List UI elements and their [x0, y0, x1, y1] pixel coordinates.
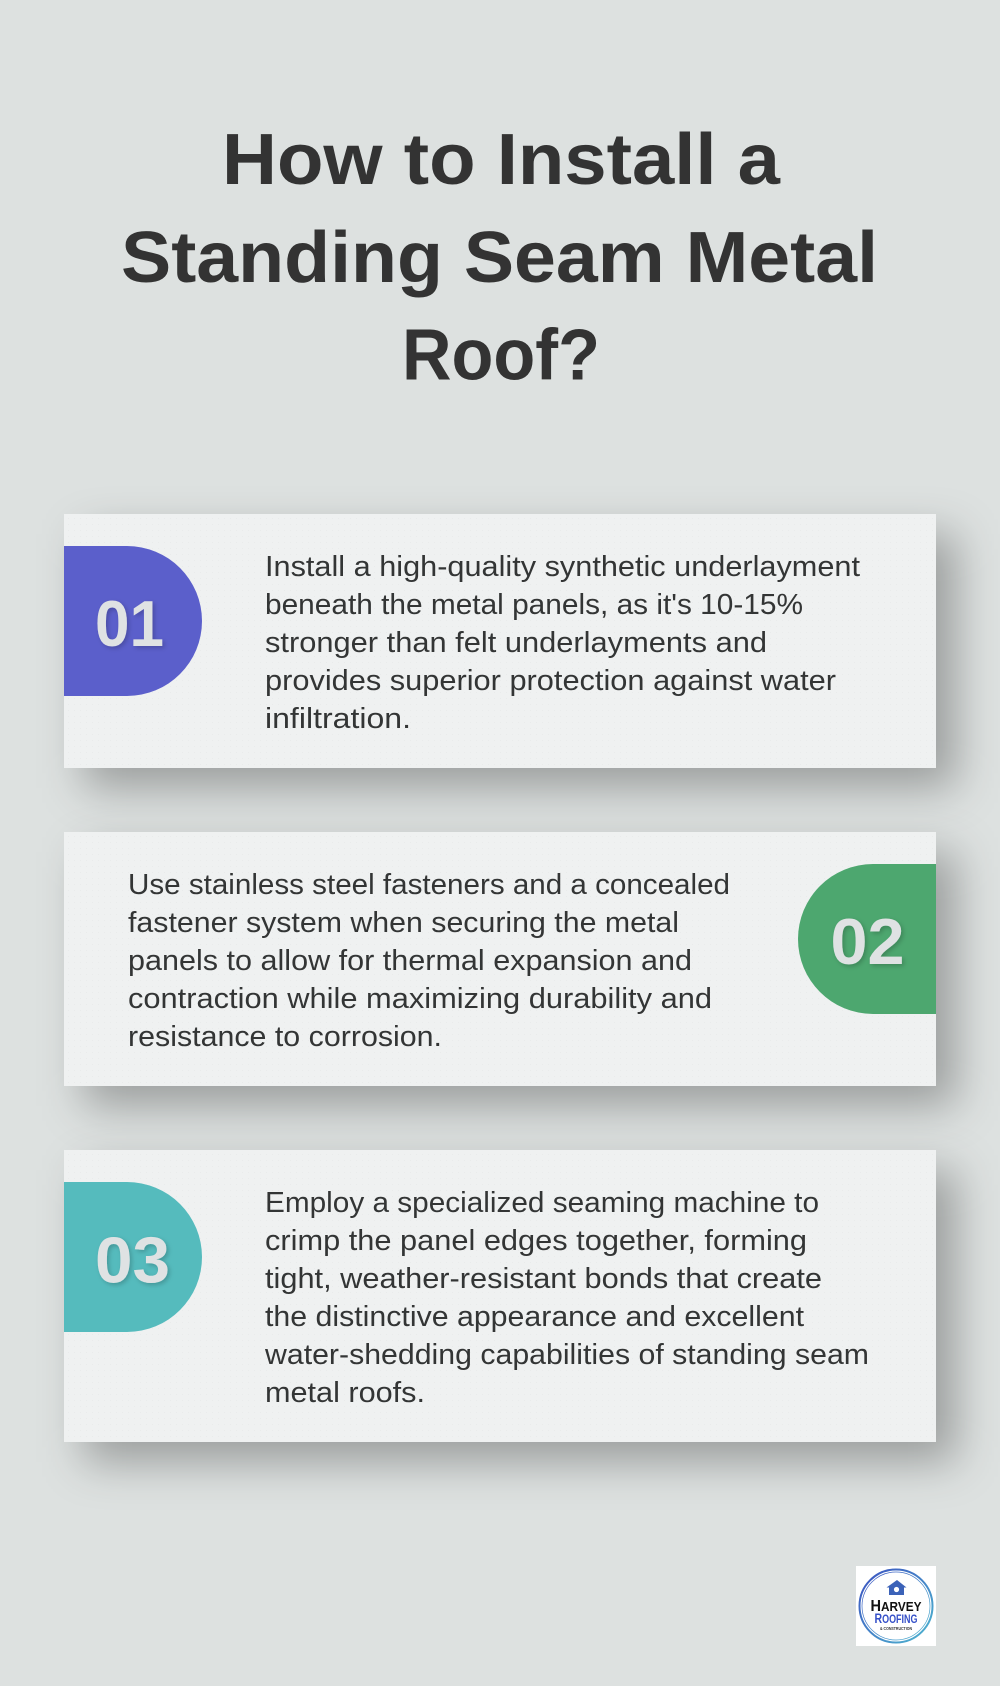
step 2 text: Use stainless steel fasteners and a concealed — [128, 869, 730, 901]
step 1 text: beneath the metal panels, as it's 10-15% — [265, 589, 803, 621]
title: How to Install a — [222, 120, 781, 200]
step 3 text: metal roofs. — [265, 1377, 425, 1409]
step 1 text: Install a high-quality synthetic underlayment — [265, 551, 860, 583]
panel: step 3 — [64, 1150, 956, 1462]
step 1 text: provides superior protection against water — [265, 665, 836, 697]
title — [121, 120, 878, 396]
step 2 text — [128, 869, 730, 1053]
logo: Harvey Roofing & Construction: ROOFING — [874, 1611, 918, 1626]
step 1 text: stronger than felt underlayments and — [265, 627, 767, 659]
logo: Harvey Roofing & Construction: HARVEY — [870, 1598, 922, 1615]
step 1 text: infiltration. — [265, 703, 411, 735]
step 2 badge: 02 — [830, 905, 904, 978]
title: Roof? — [402, 316, 600, 396]
step 2 text: panels to allow for thermal expansion and — [128, 945, 692, 977]
step 3 text: Employ a specialized seaming machine to — [265, 1187, 819, 1219]
step 3 text: the distinctive appearance and excellent — [265, 1301, 804, 1333]
step 1 text — [265, 551, 860, 735]
step 1 badge: 01 — [95, 587, 164, 660]
title: Standing Seam Metal — [121, 218, 878, 298]
step 2 text: contraction while maximizing durability and — [128, 983, 712, 1015]
panel: step 2 — [64, 832, 956, 1106]
step 3 text: water-shedding capabilities of standing seam — [264, 1339, 869, 1371]
step 1 badge — [64, 546, 202, 696]
logo: Harvey Roofing & Construction: & CONSTRUCTION — [880, 1626, 912, 1631]
icon: house with heart — [886, 1580, 906, 1595]
step 3 text — [264, 1187, 869, 1409]
step 2 text: resistance to corrosion. — [128, 1021, 442, 1053]
step 3 text: crimp the panel edges together, forming — [265, 1225, 807, 1257]
step 3 badge — [64, 1182, 202, 1332]
panel: step 1 — [64, 514, 956, 788]
logo: Harvey Roofing & Construction — [856, 1566, 936, 1646]
step 3 text: tight, weather-resistant bonds that create — [265, 1263, 822, 1295]
step 2 badge — [798, 864, 936, 1014]
step 2 text: fastener system when securing the metal — [128, 907, 679, 939]
step 3 badge: 03 — [95, 1224, 170, 1296]
